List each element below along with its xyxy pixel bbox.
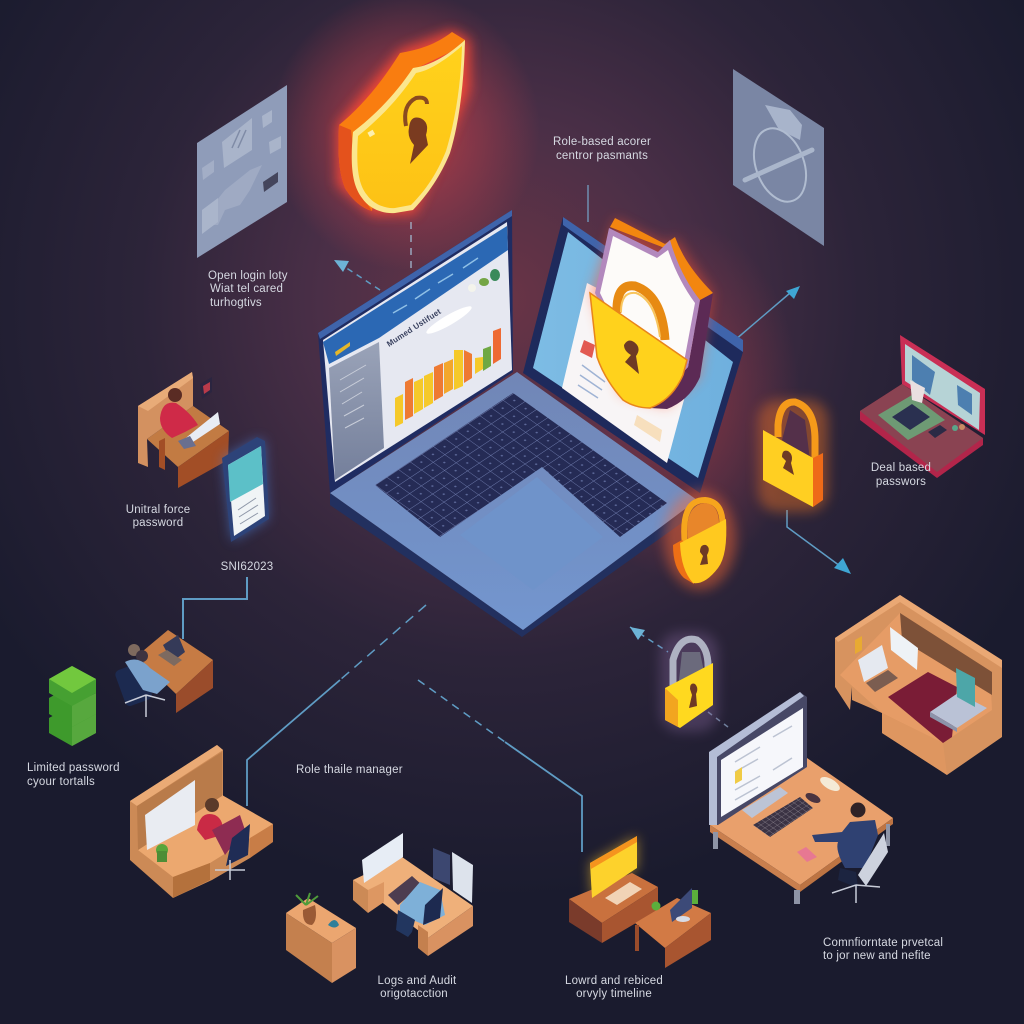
label: limited password: Limited password xyxy=(27,762,120,774)
label: role based access: centror pasmants xyxy=(556,150,648,162)
desk: person in red with laptop xyxy=(138,372,229,488)
desk: man with dark laptop xyxy=(114,630,213,717)
label: open login: Open login loty xyxy=(208,270,288,282)
right screen xyxy=(523,217,743,493)
icon: green stacked blocks xyxy=(49,666,96,746)
cube with plant xyxy=(286,893,356,983)
label: role based access: Role-based acorer xyxy=(553,136,651,148)
desk: man at big monitor xyxy=(709,692,893,904)
desk: glowing yellow monitor xyxy=(569,836,658,943)
icon: large glowing shield xyxy=(337,30,470,215)
desk: analyst with several monitors xyxy=(353,833,473,956)
desk: red laptop on mat xyxy=(860,335,985,478)
label: logs and audit: Logs and Audit xyxy=(378,975,456,987)
panel: translucent globe emblem xyxy=(733,69,824,246)
bar chart xyxy=(395,328,501,427)
icon: smartphone xyxy=(222,437,269,542)
keyboard xyxy=(375,393,667,537)
left screen xyxy=(318,210,513,493)
label: SNI2023: SNI62023 xyxy=(221,561,273,573)
icon: large padlock xyxy=(758,400,828,512)
label: unitel force: Unitral force xyxy=(126,504,190,516)
label: role manager: Role thaile manager xyxy=(296,764,403,776)
laptop xyxy=(318,210,743,637)
label: logs and audit: origotacction xyxy=(380,988,448,1000)
label: open login: Wiat tel cared xyxy=(210,283,283,295)
left screen: Mumed Ustifuet xyxy=(385,307,443,349)
label: deal based: Deal based xyxy=(871,462,931,474)
icon: shield with padlock on screen xyxy=(590,218,713,409)
label: loved and rebuked: orvyly timeline xyxy=(576,988,652,1000)
label: deal based: passwors xyxy=(876,476,926,488)
connector arrows xyxy=(183,185,851,852)
label: comfortable practical: to jor new and nefite xyxy=(823,950,931,962)
desk: small table with monitor xyxy=(635,888,711,968)
panel: translucent world map xyxy=(197,85,287,258)
label: unitel force: password xyxy=(133,517,183,529)
label: open login: turhogtivs xyxy=(210,297,262,309)
laptop base xyxy=(330,372,697,637)
desk: workstation with large screen xyxy=(130,745,273,898)
label: loved and rebuked: Lowrd and rebiced xyxy=(565,975,663,987)
icon: padlock by keyboard xyxy=(664,490,736,590)
label: comfortable practical: Comnfiorntate prvetcal xyxy=(823,937,943,949)
icon: silver shackle padlock xyxy=(660,632,718,732)
desk: cabinet with bed xyxy=(835,595,1002,775)
label: limited password: cyour tortalls xyxy=(27,776,95,788)
